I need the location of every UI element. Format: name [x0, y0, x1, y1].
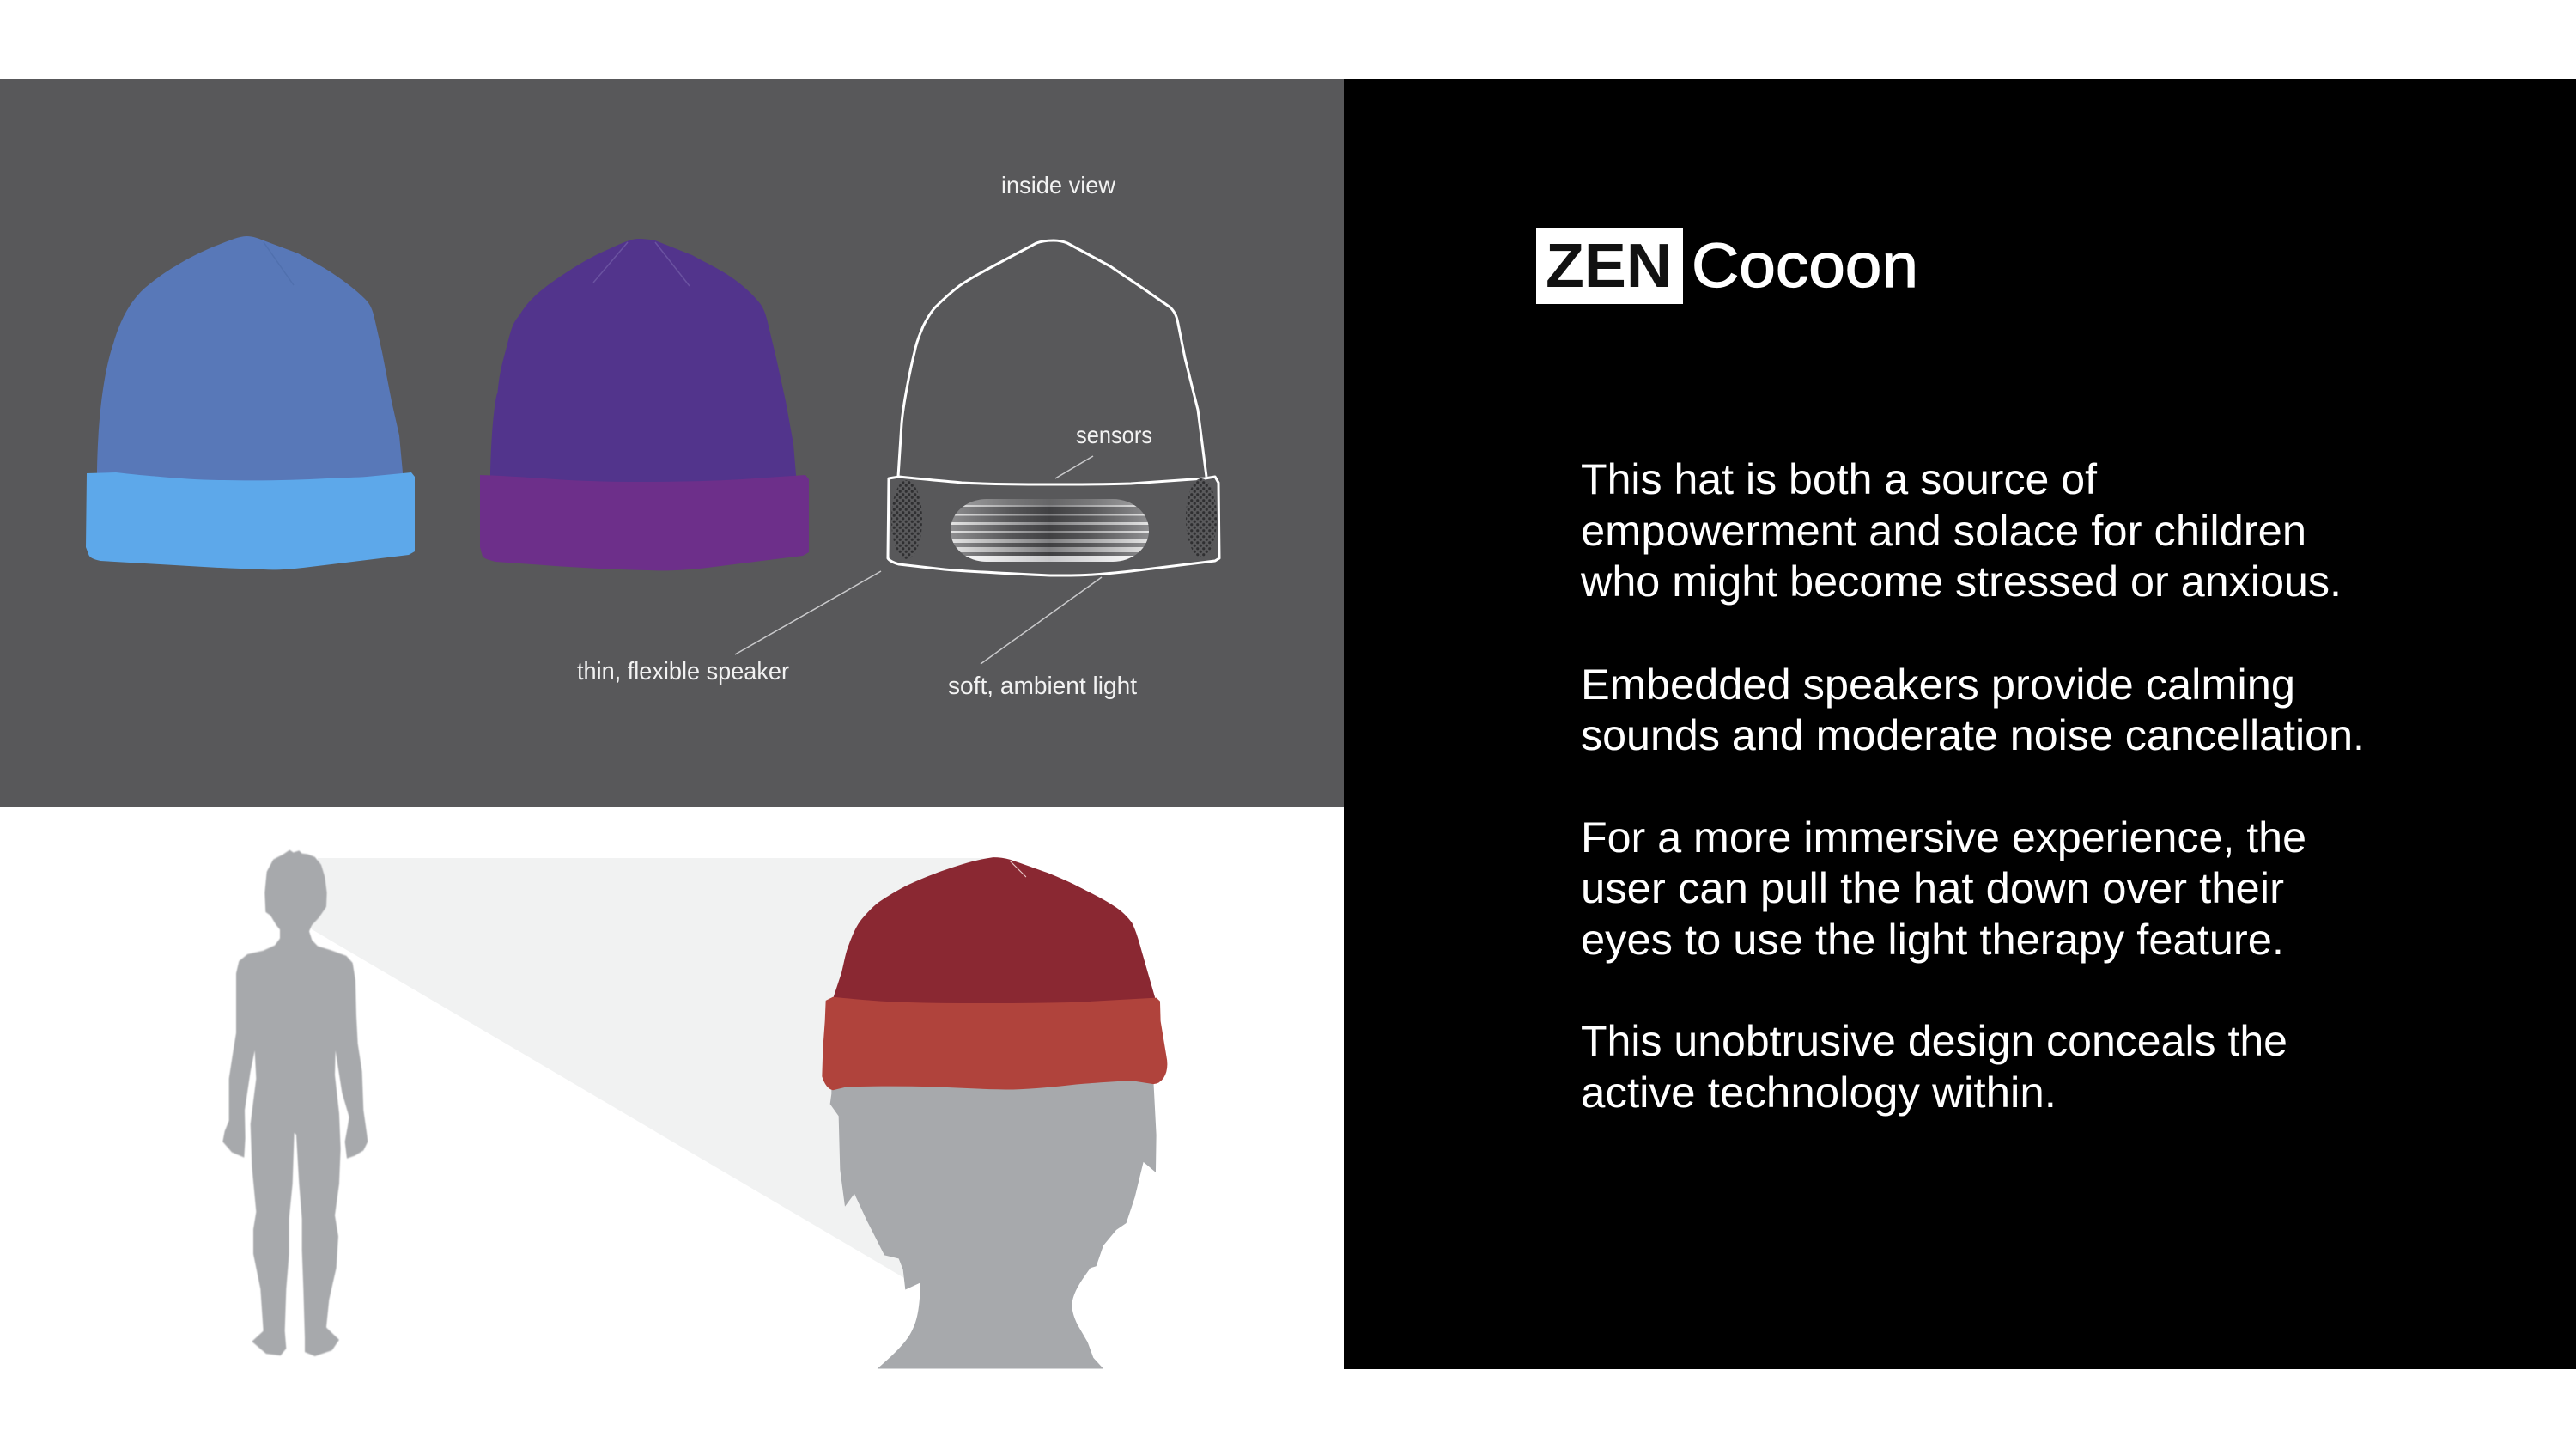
- label: thin, flexible speaker: thin, flexible speaker: [577, 658, 789, 685]
- text block: immersive experience: eyes to use the light therapy feature.: [1581, 916, 2284, 964]
- panel: product views: [0, 79, 1344, 807]
- icon: ambient light: [951, 499, 1149, 562]
- leader line: sensors: [1055, 456, 1093, 478]
- child silhouette: [222, 850, 368, 1356]
- logo: ZEN Cocoon: Cocoon: [1692, 232, 1918, 301]
- text block: speakers: sounds and moderate noise cancellation.: [1581, 711, 2365, 759]
- text block: empowerment: [1580, 455, 2342, 606]
- text block: empowerment: empowerment and solace for children: [1581, 507, 2306, 555]
- blue hat: [86, 236, 415, 569]
- text block: empowerment: who might become stressed or anxious.: [1580, 557, 2342, 606]
- head silhouette: [830, 1080, 1157, 1369]
- purple hat: [480, 239, 809, 570]
- text block: immersive experience: [1581, 813, 2306, 964]
- logo: ZEN Cocoon: [1536, 228, 1918, 304]
- text block: immersive experience: user can pull the hat down over their: [1581, 864, 2284, 912]
- panel: scale view: [222, 850, 1167, 1369]
- icon: left speaker: [891, 480, 922, 559]
- label: soft, ambient light: soft, ambient light: [948, 673, 1137, 700]
- text block: unobtrusive design: This unobtrusive design conceals the: [1581, 1017, 2287, 1065]
- text block: speakers: [1581, 661, 2365, 759]
- inside view hat outline: [888, 240, 1219, 575]
- text block: immersive experience: For a more immersive experience, the: [1581, 813, 2306, 861]
- panel: description: [1344, 79, 2576, 1369]
- leader line: speaker: [735, 571, 881, 654]
- label: sensors: sensors: [1076, 422, 1152, 448]
- icon: right speaker: [1186, 478, 1217, 557]
- red hat: [822, 857, 1167, 1090]
- label: inside view: inside view: [1001, 172, 1116, 198]
- projection wedge: [312, 858, 996, 1282]
- text block: speakers: Embedded speakers provide calming: [1581, 661, 2295, 709]
- logo: ZEN Cocoon: ZEN: [1546, 232, 1672, 301]
- text block: unobtrusive design: [1581, 1017, 2287, 1117]
- leader line: light: [981, 577, 1102, 664]
- text block: unobtrusive design: active technology within.: [1581, 1068, 2057, 1117]
- text block: empowerment: This hat is both a source of: [1581, 455, 2097, 503]
